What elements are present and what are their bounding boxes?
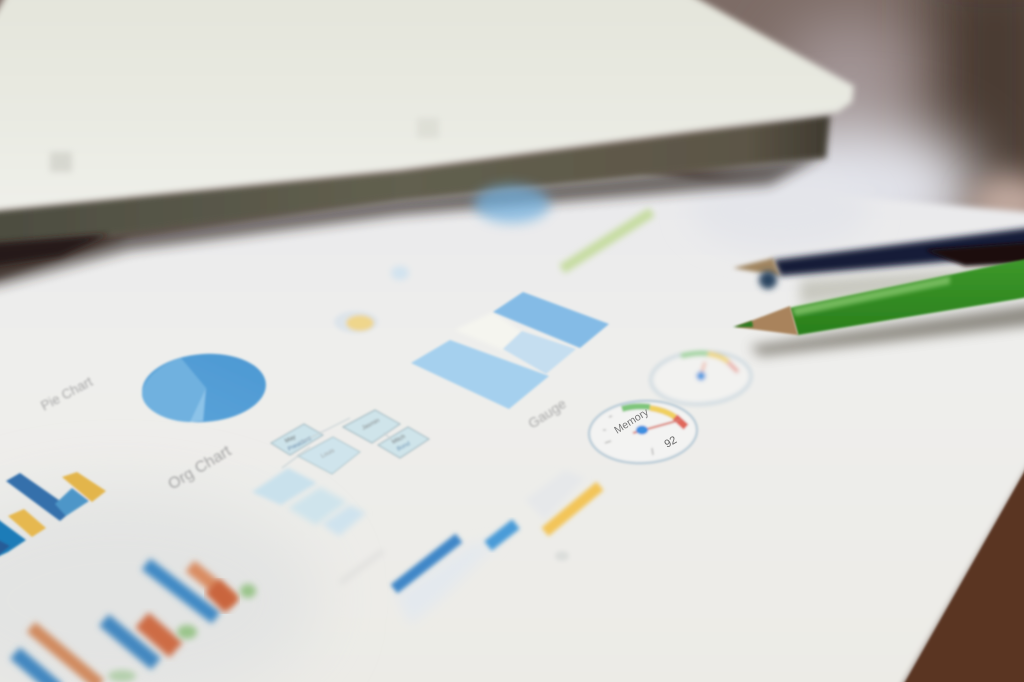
label: Gauge: Gauge — [525, 395, 569, 432]
gauge: Memory: Memory — [612, 406, 651, 437]
gauge: back — [650, 349, 752, 407]
org box: May President: President — [287, 436, 313, 453]
org connector lines — [282, 418, 392, 468]
green pencil — [733, 252, 1024, 335]
bar chart: lower foreground — [15, 564, 256, 682]
blue pencil — [733, 224, 1024, 289]
org box: Louis — [298, 437, 360, 474]
pencil shadow — [750, 262, 1024, 356]
notebook shadow on paper — [0, 155, 825, 290]
pie chart — [140, 350, 268, 426]
org box: May President: May — [284, 434, 297, 445]
label: Pie Chart: Pie Chart — [38, 374, 95, 414]
dark shadow at left under notebook — [0, 234, 110, 268]
org box: lower middle — [288, 487, 347, 525]
org box: Jasmin — [343, 410, 400, 443]
org box: Mitch Bond: Mitch — [391, 434, 407, 446]
notebook cover — [0, 0, 854, 214]
org box: Jasmin: Jasmin — [361, 418, 381, 432]
blurred green bar — [562, 212, 652, 269]
notebook — [0, 0, 854, 246]
blurred small blue dot — [391, 266, 409, 280]
small blurred legend icon — [334, 311, 378, 333]
org box: Louis: Louis — [320, 448, 336, 460]
org box: May President — [271, 424, 323, 455]
org chart — [252, 410, 429, 536]
notebook side edge — [0, 115, 830, 246]
paper sheet — [0, 170, 1024, 682]
org box: Mitch Bond: Bond — [396, 441, 411, 453]
blurred blue circle chart — [474, 185, 550, 223]
org box: Mitch Bond — [378, 427, 429, 458]
notebook corner dot marks — [50, 152, 72, 172]
org box: lower left — [252, 468, 317, 505]
label: Org Chart: Org Chart — [165, 442, 235, 493]
bar chart: left cut-off blue and yellow — [0, 472, 106, 558]
wood edge at lower right — [895, 462, 1024, 682]
bar chart: center bars — [340, 470, 600, 625]
org box: lower right — [322, 505, 366, 536]
treemap chart — [411, 292, 609, 409]
gauge: Memory — [587, 398, 699, 466]
gauge: Memory: 92 — [662, 434, 679, 451]
